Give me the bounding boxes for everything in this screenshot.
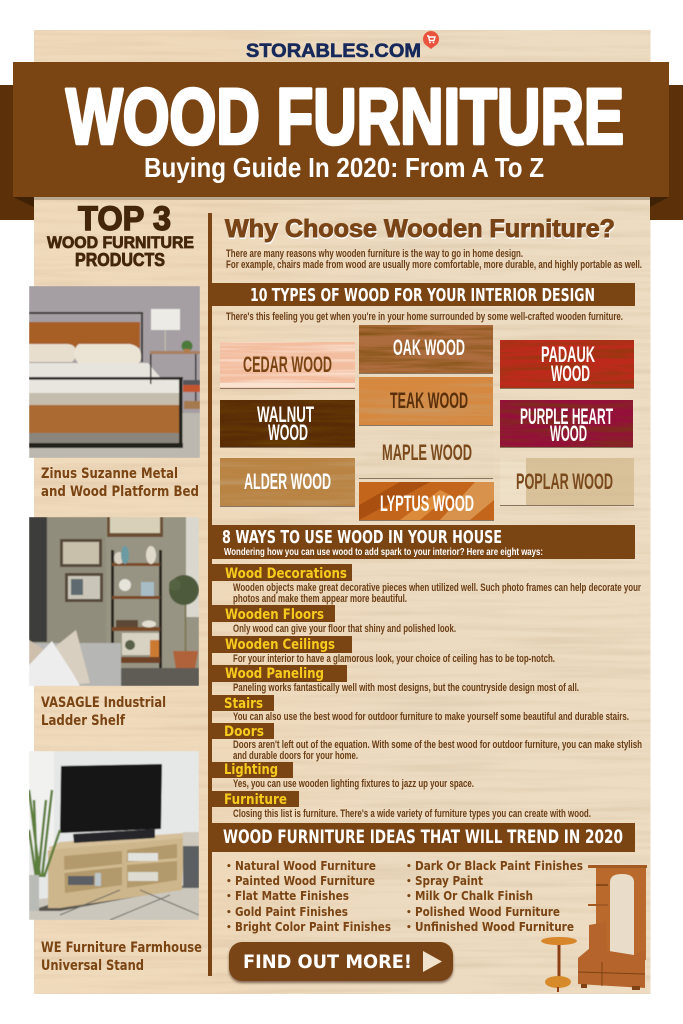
trend list: right column: Spray Paint xyxy=(415,873,483,888)
card: teak wood: TEAK WOOD xyxy=(390,388,468,413)
banner ribbon xyxy=(0,62,683,220)
heading: top 3 products: WOOD FURNITURE xyxy=(47,233,194,252)
way: stairs: Stairs xyxy=(224,696,263,712)
heading: top 3 products: PRODUCTS xyxy=(75,250,165,270)
card: purple heart wood xyxy=(500,400,633,448)
trend list: left column: Flat Matte Finishes xyxy=(235,888,349,903)
illustration: wooden dresser xyxy=(578,865,647,990)
intro text: There are many reasons why wooden furniture is the way to go in home design. xyxy=(226,248,523,260)
logo: storables.com: STORABLES.COM xyxy=(246,41,421,62)
way: lighting: Yes, you can use wooden lighting fixtures to jazz up your space. xyxy=(233,778,474,790)
button: find out more: FIND OUT MORE! xyxy=(243,951,412,973)
card: lyptus wood xyxy=(359,482,494,521)
way: wooden ceilings xyxy=(210,636,555,665)
card: walnut wood xyxy=(220,400,355,448)
way: stairs xyxy=(210,695,629,723)
section header: trends xyxy=(210,823,635,852)
section header: 8 ways xyxy=(210,525,635,559)
trend list: left column: Gold Paint Finishes xyxy=(235,904,348,919)
trend list: left column: Natural Wood Furniture xyxy=(235,858,376,873)
card: maple wood xyxy=(359,430,493,479)
card: lyptus wood: LYPTUS WOOD xyxy=(380,491,474,516)
card: teak wood xyxy=(359,377,493,426)
product name: bed xyxy=(41,466,199,500)
card: walnut wood: WOOD xyxy=(268,420,308,445)
way: wooden ceilings: Wooden Ceilings xyxy=(225,637,335,653)
way: doors: Doors xyxy=(224,724,264,740)
intro text xyxy=(226,248,642,271)
trend list: right column: • xyxy=(406,908,412,918)
trend list: left column: • xyxy=(226,862,232,872)
photo: tv stand xyxy=(29,751,199,920)
product name: ladder shelf: Ladder Shelf xyxy=(41,713,126,729)
card: maple wood: MAPLE WOOD xyxy=(382,440,472,465)
card: poplar wood: POPLAR WOOD xyxy=(516,469,613,494)
product name: tv stand: Universal Stand xyxy=(41,958,144,974)
icon: play arrow xyxy=(423,951,442,972)
heading: top 3 products xyxy=(47,200,194,270)
card: padauk wood: WOOD xyxy=(551,361,590,386)
product name: ladder shelf: VASAGLE Industrial xyxy=(41,695,166,711)
card: padauk wood xyxy=(500,340,634,389)
way: doors xyxy=(210,723,642,762)
card: poplar wood xyxy=(500,458,634,506)
way: furniture: Furniture xyxy=(224,792,287,808)
product name: ladder shelf xyxy=(41,695,166,729)
photo: ladder shelf xyxy=(29,517,199,686)
way: wooden floors xyxy=(210,605,456,635)
way: wood paneling xyxy=(210,665,579,694)
way: wooden ceilings: For your interior to have a glamorous look, your choice of ceiling has to be top-notch. xyxy=(233,653,555,665)
trend list: left column: • xyxy=(226,877,232,887)
heading: top 3 products: TOP 3 xyxy=(78,200,171,238)
way: wooden floors: Wooden Floors xyxy=(225,607,324,623)
way: doors: and durable doors for your home. xyxy=(233,750,358,762)
card: alder wood: ALDER WOOD xyxy=(244,469,331,494)
card: alder wood xyxy=(220,458,355,507)
photo: bed xyxy=(29,286,200,458)
way: wood decorations: Wood Decorations xyxy=(225,566,347,582)
logo: storables.com xyxy=(246,31,439,62)
trend list: right column: Dark Or Black Paint Finishes xyxy=(415,858,583,873)
illustration: round side table xyxy=(541,937,577,992)
card: purple heart wood: WOOD xyxy=(550,421,587,446)
way: furniture xyxy=(210,791,591,820)
vertical divider xyxy=(208,213,212,976)
way: wooden floors: Only wood can give your floor that shiny and polished look. xyxy=(233,623,456,635)
trend list: left column xyxy=(226,858,391,934)
way: wood decorations xyxy=(210,564,642,605)
trend list: left column: Painted Wood Furniture xyxy=(235,873,375,888)
way: wood paneling: Wood Paneling xyxy=(225,666,324,682)
subtitle: Buying Guide In 2020: From A To Z xyxy=(144,152,544,183)
trend list: left column: Bright Color Paint Finishes xyxy=(235,919,391,934)
card: oak wood: OAK WOOD xyxy=(393,335,465,360)
trend list: left column: • xyxy=(226,892,232,902)
trend list: right column: • xyxy=(406,892,412,902)
card: padauk wood: PADAUK xyxy=(541,342,595,367)
product name: bed: Zinus Suzanne Metal xyxy=(41,466,178,482)
product name: bed: and Wood Platform Bed xyxy=(41,484,199,500)
trend list: right column: • xyxy=(406,877,412,887)
trend list: right column xyxy=(406,858,583,934)
trend list: left column: • xyxy=(226,908,232,918)
way: wood decorations: photos and make them appear more beautiful. xyxy=(233,593,407,605)
way: lighting: Lighting xyxy=(224,762,278,778)
product name: tv stand: WE Furniture Farmhouse xyxy=(41,940,202,956)
card: oak wood xyxy=(359,325,493,374)
card: cedar wood xyxy=(220,342,355,389)
product name: tv stand xyxy=(41,940,202,974)
section header: 8 ways: Wondering how you can use wood to add spark to your interior? Here are eight ways: xyxy=(224,546,543,558)
way: lighting xyxy=(210,762,474,790)
button: find out more xyxy=(229,942,453,981)
section header: 8 ways: 8 WAYS TO USE WOOD IN YOUR HOUSE xyxy=(222,527,502,548)
card: cedar wood: CEDAR WOOD xyxy=(243,352,332,377)
icon: shopping cart badge xyxy=(423,31,439,49)
trend list: right column: Unfinished Wood Furniture xyxy=(415,919,574,934)
trend list: right column: Milk Or Chalk Finish xyxy=(415,888,533,903)
trend list: right column: • xyxy=(406,862,412,872)
trend list: left column: • xyxy=(226,923,232,933)
card: walnut wood: WALNUT xyxy=(257,402,314,427)
trend list: right column: Polished Wood Furniture xyxy=(415,904,560,919)
heading: why choose wooden furniture: Why Choose Wooden Furniture? xyxy=(225,215,615,243)
trend list: right column: • xyxy=(406,923,412,933)
